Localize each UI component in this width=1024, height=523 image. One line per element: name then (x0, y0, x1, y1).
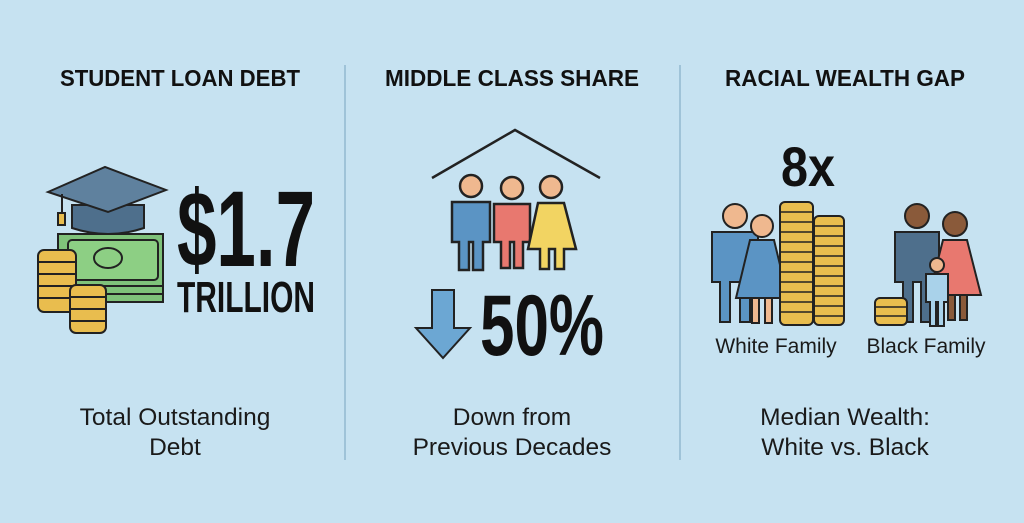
icon: down arrow (416, 290, 470, 358)
caption: median wealth (760, 404, 930, 461)
icon: white family with tall coin stacks (712, 202, 844, 325)
label: black family: Black Family (866, 335, 986, 358)
icon: house roof with family (432, 130, 600, 270)
caption: median wealth: White vs. Black (761, 434, 929, 461)
heading: racial wealth gap: RACIAL WEALTH GAP (725, 65, 965, 91)
caption: total outstanding debt (80, 404, 270, 461)
heading: middle class share: MIDDLE CLASS SHARE (385, 65, 639, 91)
heading: student loan debt: STUDENT LOAN DEBT (60, 65, 300, 91)
stat: $1.7 trillion: $1.7 (177, 168, 315, 289)
caption: down from previous decades (413, 404, 611, 461)
stat: $1.7 trillion (177, 168, 315, 322)
icon: graduation cap with money and coins (38, 167, 166, 333)
stat: 50%: 50% (480, 278, 604, 374)
caption: down from previous decades: Previous Decades (413, 434, 611, 461)
caption: median wealth: Median Wealth: (760, 404, 930, 431)
stat: 8x: 8x (781, 135, 835, 198)
icon: black family with small coin stack (875, 204, 981, 326)
label: white family: White Family (715, 335, 837, 358)
caption: total outstanding debt: Debt (149, 434, 201, 461)
caption: total outstanding debt: Total Outstanding (80, 404, 270, 431)
caption: down from previous decades: Down from (453, 404, 571, 431)
stat: $1.7 trillion: TRILLION (177, 273, 315, 322)
